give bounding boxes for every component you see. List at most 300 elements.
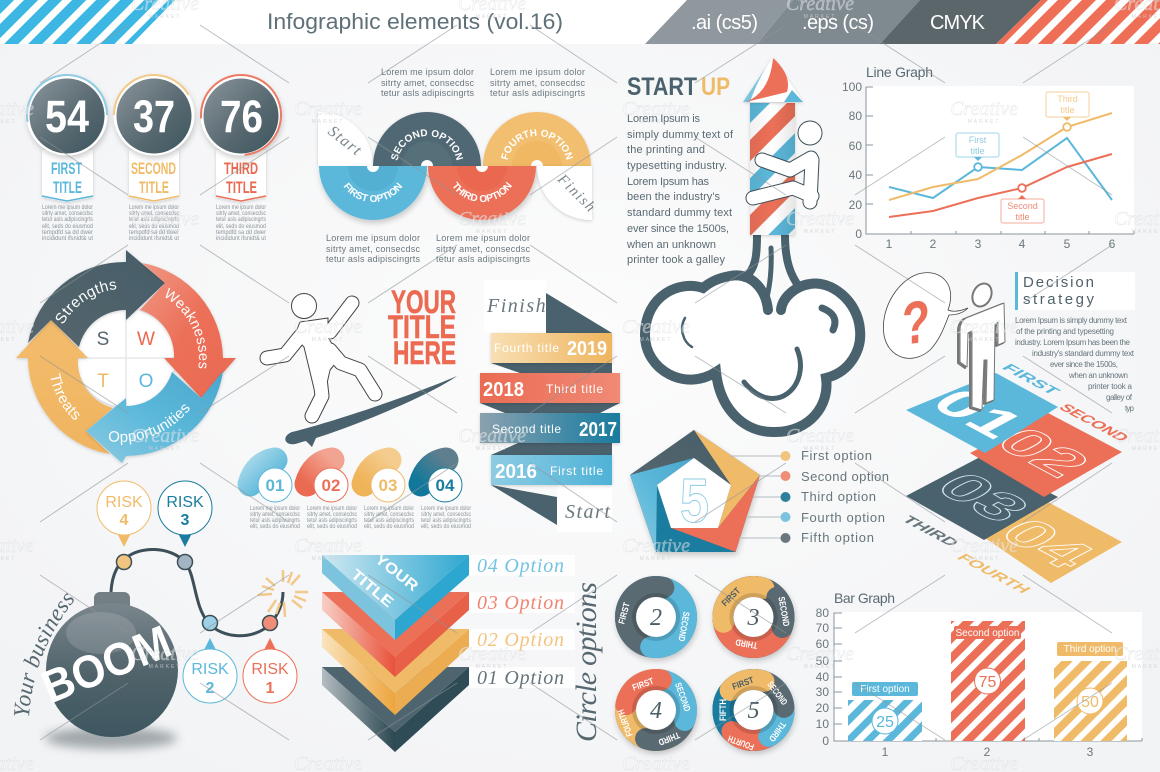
second option arc: SECOND OPTION: [391, 129, 464, 160]
wave bottom text: sitrty amet, consecdsc: [436, 244, 530, 254]
watermark marks: MARKET: [640, 337, 672, 343]
badge captions: [42, 205, 266, 242]
arrow: opportunities: [86, 371, 224, 464]
panel: line graph: [842, 64, 1134, 251]
line graph axes: 3: [975, 237, 982, 251]
circle option 2: SECOND: [676, 611, 691, 643]
badge 54: TITLE: [53, 178, 82, 197]
fuse nodes: [116, 554, 278, 630]
bar 2017: Second title: [492, 422, 561, 436]
wave top text: tetur asls adipiscingrts: [490, 88, 586, 98]
bar third option: 50: [1081, 694, 1099, 711]
badge captions: Lorem me ipsum dolor: [129, 205, 179, 211]
badge captions: elit, seds do eiusmod: [42, 224, 93, 230]
line graph axes: 40: [849, 168, 862, 182]
badge 37: 37: [133, 91, 175, 142]
line graph axes: 0: [855, 227, 862, 241]
badge 54: FIRST: [51, 159, 82, 178]
badge 37: [114, 74, 194, 202]
bar 2019: Fourth title: [494, 341, 559, 355]
risk 3 marker: RISK: [166, 494, 204, 511]
risk 1 marker: [243, 638, 297, 703]
smoke cloud: [645, 235, 860, 432]
plot area: [866, 86, 1134, 234]
badge captions: sitrty amet, consecdsc: [42, 211, 93, 217]
decision paragraph: when an unknown: [1068, 371, 1128, 380]
bean 04: [421, 460, 462, 502]
bar axes: [816, 606, 1142, 759]
bar second option: 75: [979, 674, 996, 691]
bar 2018: Third title: [546, 382, 603, 396]
line graph axes: 5: [1064, 237, 1071, 251]
startup paragraph: when an unknown: [626, 239, 716, 251]
bean captions: tetur asls adipiscingrts: [250, 518, 300, 524]
startup paragraph: printer took a galley: [627, 254, 726, 266]
bar third option: [1054, 642, 1127, 741]
bar plot area: [834, 612, 1142, 741]
badge 37: SECOND: [131, 159, 176, 178]
bean captions: Lorem me ipsum dolor: [307, 506, 357, 512]
layer 04 blue with title: [322, 551, 469, 640]
tile 01: 01: [917, 380, 1040, 446]
fourth option arc: FOURTH OPTION: [501, 129, 573, 160]
question bubble: [883, 273, 968, 358]
bean 02: [307, 460, 348, 502]
bar axes: 1: [882, 745, 889, 759]
panel: circle options: [613, 574, 797, 753]
watermark marks: MARKET: [149, 664, 181, 670]
bomb body: BOOM: [34, 615, 178, 713]
line graph axes: 20: [849, 198, 862, 212]
bomb shadow: [45, 727, 177, 749]
arrow: opportunities: Opportunities: [108, 404, 190, 446]
bar second option: Second option: [956, 628, 1019, 639]
wave top text: tetur asls adipiscingrts: [381, 88, 474, 98]
decision paragraph: of the printing and typesetting: [1016, 327, 1114, 336]
badge 54: [21, 69, 113, 202]
badge 76: 76: [220, 91, 263, 142]
layer labels: 01 Option: [477, 667, 566, 689]
watermark marks: Creative: [458, 425, 526, 447]
watermark marks: MARKET: [804, 446, 836, 452]
bar axes: 10: [816, 717, 829, 731]
pentagon leader lines: [730, 456, 785, 538]
watermark marks: MARKET: [149, 446, 181, 452]
bean 04: 04: [436, 476, 455, 495]
bar first option: [848, 682, 922, 741]
startup paragraph: [626, 113, 734, 266]
SWOT centre disc: S: [97, 329, 109, 350]
watermark marks: MARKET: [476, 446, 508, 452]
callout first title: title: [970, 146, 985, 156]
startup paragraph: typesetting industry.: [627, 160, 727, 172]
startup paragraph: the printing and: [627, 144, 705, 156]
watermark marks: MARKET: [804, 229, 836, 235]
watermark marks: MARKET: [804, 664, 836, 670]
fourth option arc: [482, 112, 592, 168]
pentagon: [630, 430, 760, 552]
series lines: [889, 113, 1112, 217]
bean captions: Lorem me ipsum dolor: [421, 506, 471, 512]
header title: Infographic elements (vol.16): [267, 9, 563, 34]
panel: timeline ribbon: [480, 280, 620, 532]
tile labels: SECOND: [1054, 402, 1133, 444]
badge 54: 54: [45, 91, 89, 142]
tile 01: [906, 373, 1058, 453]
startup heading: UP: [701, 73, 730, 101]
bar 2017: 2017: [579, 419, 617, 441]
bar third option: Third option: [1064, 644, 1116, 655]
tile 02: [970, 413, 1122, 497]
badge 76: THIRD: [224, 159, 258, 178]
watermark marks: Creative: [622, 316, 690, 338]
line graph axes: 60: [849, 139, 862, 153]
wave bottom text: [326, 233, 530, 264]
startup paragraph: simply dummy text of: [627, 129, 734, 141]
third option arc: THIRD OPTION: [453, 182, 512, 202]
wave bottom text: tetur asls adipiscingrts: [436, 254, 530, 264]
bar axes: 50: [816, 654, 829, 668]
tile 02: 02: [982, 419, 1105, 485]
circle option 3: [711, 574, 796, 660]
circle option 2: [613, 574, 699, 660]
badge captions: sitrty amet, consecdsc: [129, 211, 179, 217]
first option arc: [318, 166, 430, 226]
line graph axes: 1: [886, 237, 893, 251]
pentagon legend: [780, 448, 889, 545]
bar axes: 3: [1087, 745, 1094, 759]
badge 37: TITLE: [139, 178, 169, 197]
badge captions: tetur asls adipiscingrts: [42, 217, 93, 223]
arrow: weaknesses: Weaknesses: [166, 288, 207, 368]
circle option 5: FIRST: [731, 675, 755, 692]
wave bottom text: tetur asls adipiscingrts: [326, 254, 420, 264]
SWOT centre disc: [77, 309, 175, 407]
bean captions: [250, 506, 471, 530]
watermark marks: Creative: [950, 535, 1018, 557]
circle option 5: [710, 667, 797, 753]
layer 04 blue with title: YOUR: [372, 551, 422, 595]
callout third title: Third: [1057, 94, 1078, 104]
wave bottom text: sitrty amet, consecdsc: [326, 244, 420, 254]
startup paragraph: standard dummy text: [627, 207, 732, 219]
ribbon dark folds: [480, 293, 620, 525]
bean 02: 02: [322, 476, 340, 495]
format tab eps: [757, 0, 920, 44]
badge captions: sitrty amet, consecdsc: [216, 211, 266, 217]
watermark marks: Creative: [294, 98, 362, 120]
tile labels: FOURTH: [952, 552, 1034, 596]
bar axes: 2: [984, 745, 991, 759]
fuse spark: [258, 570, 308, 617]
badge captions: Lorem me ipsum dolor: [216, 205, 266, 211]
panel: wave options: [316, 67, 599, 264]
bar axes: 20: [816, 701, 829, 715]
badge captions: elit, seds do eiusmod: [216, 224, 266, 230]
surfer figure: [267, 294, 375, 416]
watermark marks: Creative: [131, 425, 199, 447]
pentagon legend: Second option: [801, 469, 889, 484]
bean 01: [250, 460, 292, 502]
bar second option: [951, 621, 1025, 741]
startup heading: START: [627, 73, 697, 101]
layer 04 blue with title: TITLE: [347, 566, 397, 611]
panel: decision strategy: [883, 272, 1135, 596]
SWOT centre disc: W: [137, 329, 155, 350]
watermark marks: MARKET: [640, 119, 672, 125]
badge captions: elit, seds do eiusmod: [129, 224, 179, 230]
circle option 4: FIRST: [631, 676, 655, 693]
decision paragraph: industry's standard dummy text: [1032, 349, 1135, 358]
risk 3 marker: 3: [181, 512, 190, 529]
layer labels: 04 Option: [477, 555, 566, 577]
panel: number badges: [21, 69, 284, 242]
pentagon legend: Fifth option: [801, 530, 874, 545]
wave bottom text: Lorem me ipsum dolor: [436, 233, 530, 243]
badge captions: incididunt ifsnidt& ut: [129, 236, 179, 242]
circle option 5: 5: [748, 698, 760, 724]
watermark marks: Creative: [131, 643, 199, 665]
your title here heading: HERE: [393, 335, 456, 371]
badge captions: tempdfd sa dd dwer: [42, 230, 93, 236]
decision paragraph: ever since the 1500s,: [1050, 360, 1118, 369]
start label: Start: [565, 501, 611, 523]
layer 02 yellow: [322, 629, 469, 715]
finish tab: [537, 166, 599, 220]
second option arc: [372, 112, 482, 168]
pentagon legend: Third option: [801, 489, 876, 504]
circle option 3: FIRST: [720, 585, 742, 608]
bean 03: 03: [379, 476, 397, 495]
pentagon legend: Fourth option: [801, 510, 885, 525]
bean captions: tetur asls adipiscingrts: [421, 518, 471, 524]
badge captions: tetur asls adipiscingrts: [216, 217, 266, 223]
bar axes: 60: [816, 637, 829, 651]
bar 2019: 2019: [567, 338, 607, 360]
circle option 4: 4: [650, 698, 662, 724]
watermark marks: MARKET: [312, 119, 344, 125]
tile labels: THIRD: [897, 514, 963, 549]
pentagon: 5: [680, 467, 709, 536]
circle option 3: 3: [746, 605, 760, 631]
your title here heading: TITLE: [388, 309, 456, 345]
risk 1 marker: 1: [266, 680, 275, 697]
watermark marks: Creative: [131, 208, 199, 230]
decision paragraph: industry. Lorem Ipsum has been the: [1015, 338, 1131, 347]
circle option 3: SECOND: [776, 596, 792, 627]
layer labels: 03 Option: [477, 592, 566, 614]
callout third title: [1046, 92, 1089, 131]
line graph axes: 2: [930, 237, 937, 251]
layer 01 dark: [322, 667, 469, 752]
watermark marks: Creative: [458, 643, 526, 665]
bean captions: tetur asls adipiscingrts: [307, 518, 357, 524]
circle option 4: THIRD: [657, 730, 681, 748]
panel: startup rocket: [626, 57, 860, 432]
panel: numbered beans: [250, 460, 471, 530]
watermark marks: MARKET: [640, 556, 672, 562]
risk 4 marker: 4: [120, 512, 129, 529]
watermark marks: Creative: [622, 98, 690, 120]
arrow: strengths: Strengths: [56, 281, 116, 324]
wave top text: [381, 67, 586, 98]
circle options heading: Circle options: [570, 582, 603, 742]
bar 2018: [480, 373, 620, 403]
start tab: [318, 112, 373, 166]
watermark marks: MARKET: [968, 119, 1000, 125]
watermark marks: MARKET: [312, 337, 344, 343]
finish label: Finish: [486, 295, 547, 317]
wave top text: sitrty amet, consecdsc: [490, 78, 586, 88]
badge 76: TITLE: [226, 178, 257, 197]
panel: bar graph: [816, 590, 1142, 759]
wave top text: sitrty amet, consecdsc: [381, 78, 474, 88]
arrow: strengths: [28, 250, 165, 348]
watermark marks: MARKET: [149, 229, 181, 235]
circle option 5: FIFTH: [718, 699, 728, 721]
callout second title: title: [1015, 212, 1030, 222]
pentagon legend: First option: [801, 448, 872, 463]
panel: layered chevrons: [322, 551, 575, 752]
line graph axes: 80: [849, 109, 862, 123]
watermark marks: Creative: [786, 425, 854, 447]
risk 4 marker: [97, 481, 151, 547]
circle option 3: THIRD: [734, 637, 758, 651]
callout second title: Second: [1007, 201, 1038, 211]
format tab ai: [645, 0, 793, 44]
bar 2017: [480, 413, 620, 443]
decision paragraph: galley of: [1106, 393, 1133, 402]
circle option 2: FIRST: [616, 601, 632, 625]
bar axes: 40: [816, 670, 829, 684]
bean captions: tetur asls adipiscingrts: [364, 518, 414, 524]
format tab eps: .eps (cs): [802, 12, 874, 34]
bean captions: sitrty amet, consecdsc: [364, 512, 414, 518]
format tab cmyk: CMYK: [930, 12, 986, 34]
watermark marks: MARKET: [476, 664, 508, 670]
watermark marks: Creative: [786, 208, 854, 230]
circle option 4: SECOND: [673, 681, 693, 713]
bar axes: 0: [822, 734, 829, 748]
line graph axes: 6: [1109, 237, 1116, 251]
layer labels: [469, 555, 575, 689]
bar first option: 25: [876, 714, 894, 731]
startup paragraph: ever since the 1500s,: [627, 223, 729, 235]
watermark marks: MARKET: [968, 556, 1000, 562]
callout second title: [1001, 184, 1044, 223]
decision paragraph: Lorem Ipsum is simply dummy text: [1015, 316, 1128, 325]
badge captions: Lorem me ipsum dolor: [42, 205, 93, 211]
watermark marks: MARKET: [476, 14, 508, 20]
tile 04: 04: [986, 510, 1109, 576]
finish tab: Finish: [553, 171, 599, 216]
callout third title: title: [1060, 105, 1075, 115]
line graph axes: 4: [1019, 237, 1026, 251]
bomb body: [34, 592, 178, 737]
format tab ai: .ai (cs5): [691, 12, 758, 34]
arrow: weaknesses: [140, 263, 236, 398]
header blue stripes: [0, 0, 175, 44]
circle option 5: FOURTH: [727, 734, 755, 752]
callout first title: First: [969, 135, 987, 145]
layer 03 red: [322, 592, 469, 677]
circle option 5: THIRD: [767, 720, 788, 744]
SWOT centre disc: T: [97, 371, 109, 392]
first option arc: FIRST OPTION: [344, 182, 402, 202]
watermark marks: Creative: [458, 208, 526, 230]
bean 01: 01: [266, 476, 284, 495]
watermark marks: MARKET: [804, 14, 836, 20]
bean captions: Lorem me ipsum dolor: [364, 506, 414, 512]
fuse: [111, 549, 283, 636]
watermark marks: MARKET: [149, 14, 181, 20]
callout first title: [956, 133, 999, 171]
bar axes: 80: [816, 606, 829, 620]
badge captions: tempdfd sa dd dwer: [129, 230, 179, 236]
format tab cmyk: [880, 0, 1041, 44]
circle option 4: FOURTH: [616, 708, 635, 738]
tile 04: [985, 502, 1122, 583]
panel: risk bomb: [14, 480, 308, 755]
risk 1 marker: RISK: [251, 661, 289, 678]
bar graph title: Bar Graph: [834, 590, 895, 606]
bar axes: 30: [816, 685, 829, 699]
line graph axes: 100: [842, 80, 862, 94]
panel: SWOT cycle: [16, 250, 236, 464]
badge captions: incididunt ifsnidt& ut: [216, 236, 266, 242]
isometric person: [958, 280, 1005, 411]
risk 4 marker: RISK: [105, 494, 143, 511]
decision heading: strategy: [1023, 291, 1094, 308]
your title here heading: YOUR: [391, 284, 456, 320]
arrow: threats: Threats: [50, 373, 80, 420]
risk 2 marker: 2: [206, 680, 215, 697]
risk 2 marker: [183, 638, 237, 703]
header red stripes: [996, 0, 1160, 44]
surfboard: [285, 376, 457, 447]
circle option 2: 2: [650, 605, 662, 631]
watermark marks: Creative: [786, 643, 854, 665]
header band: [0, 0, 1160, 44]
watermark marks: Creative: [950, 316, 1018, 338]
panel: pentagon options: [630, 430, 889, 552]
bar 2016: [491, 455, 612, 485]
decision paragraph: printer took a: [1088, 382, 1133, 391]
startup paragraph: Lorem Ipsum has: [627, 176, 710, 188]
circle option 5: SECOND: [765, 679, 790, 707]
decision paragraph: [1015, 316, 1135, 413]
wave bottom text: Lorem me ipsum dolor: [326, 233, 420, 243]
bar first option: First option: [860, 684, 910, 695]
watermark marks: MARKET: [312, 556, 344, 562]
SWOT centre disc: O: [139, 371, 153, 392]
badge captions: incididunt ifsnidt& ut: [42, 236, 93, 242]
wave top text: Lorem me ipsum dolor: [490, 67, 585, 77]
bean 03: [364, 460, 405, 502]
watermark marks: Creative: [950, 98, 1018, 120]
watermark marks: Creative: [622, 535, 690, 557]
startup paragraph: been the industry's: [627, 191, 720, 203]
watermark marks: Creative: [294, 316, 362, 338]
startup paragraph: Lorem Ipsum is: [627, 113, 700, 125]
bean captions: sitrty amet, consecdsc: [307, 512, 357, 518]
decision heading: Decision: [1023, 274, 1094, 291]
line graph title: Line Graph: [866, 64, 933, 80]
watermark marks: Creative: [294, 535, 362, 557]
badge captions: tetur asls adipiscingrts: [129, 217, 179, 223]
watermark marks: MARKET: [968, 337, 1000, 343]
bean captions: Lorem me ipsum dolor: [250, 506, 300, 512]
